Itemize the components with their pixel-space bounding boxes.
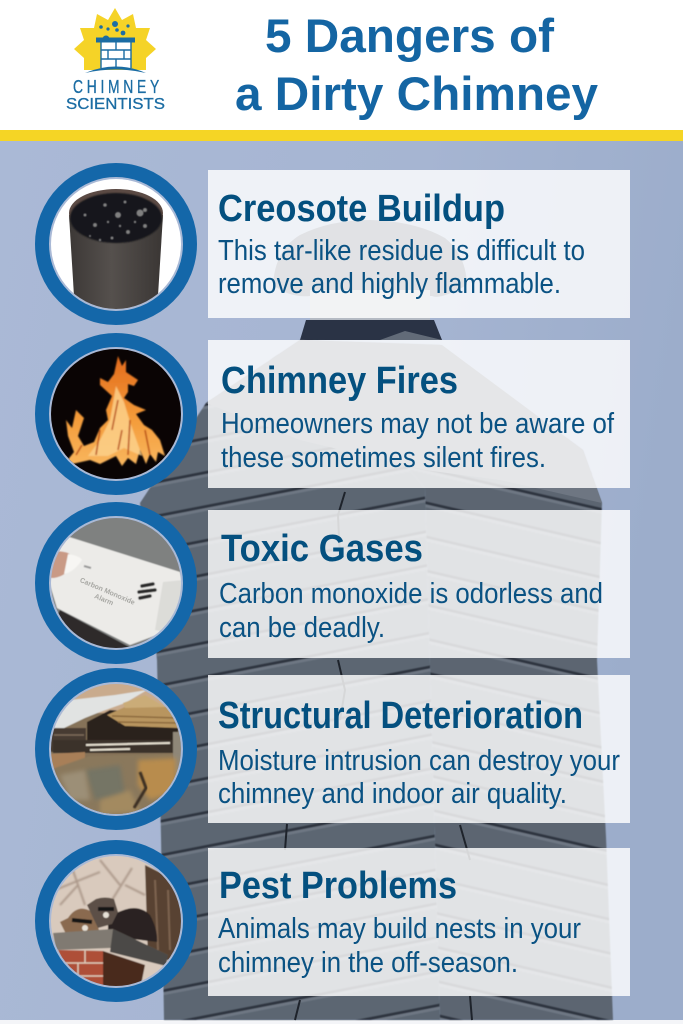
header background	[0, 0, 683, 130]
text block	[218, 235, 585, 300]
text block	[218, 913, 581, 979]
heading: Chimney Fires	[221, 360, 458, 402]
text block: chimney in the off-season.	[218, 947, 518, 979]
icon: yellow starburst	[74, 8, 156, 70]
logo wordmark: CHIMNEY	[73, 77, 159, 98]
heading: Toxic Gases	[221, 528, 423, 570]
panel: creosote buildup	[208, 170, 630, 318]
text block	[218, 745, 620, 810]
icon: fire photo	[42, 340, 190, 488]
logo wordmark	[66, 77, 165, 113]
text block: can be deadly.	[219, 612, 385, 644]
text block: Moisture intrusion can destroy your	[218, 745, 620, 777]
text block: these sometimes silent fires.	[221, 442, 546, 474]
text block: This tar-like residue is difficult to	[218, 235, 585, 267]
logo wordmark: SCIENTISTS	[66, 96, 165, 113]
text block: Animals may build nests in your	[218, 913, 581, 945]
icon: carbon monoxide alarm photo	[42, 509, 190, 657]
icon: deteriorated masonry photo	[42, 675, 190, 823]
panel: pest problems	[208, 848, 630, 996]
text block: Carbon monoxide is odorless and	[219, 578, 603, 610]
text block: remove and highly flammable.	[218, 268, 561, 300]
icon: carbon monoxide alarm photo: Carbon Monoxide	[79, 577, 136, 607]
heading: Creosote Buildup	[218, 188, 505, 230]
panel: structural deterioration	[208, 675, 630, 823]
title	[235, 9, 598, 120]
panel: toxic gases	[208, 510, 630, 658]
heading: Pest Problems	[219, 865, 457, 907]
icon: raccoons on chimney photo	[42, 847, 190, 995]
title: a Dirty Chimney	[235, 67, 598, 120]
logo: Chimney Scientists	[66, 8, 165, 113]
title: 5 Dangers of	[265, 9, 554, 62]
icon: creosote-filled pipe photo	[42, 170, 190, 318]
text block	[221, 408, 615, 474]
text block: chimney and indoor air quality.	[218, 778, 567, 810]
text block: Homeowners may not be aware of	[221, 408, 615, 440]
heading: Structural Deterioration	[218, 695, 583, 737]
icon: carbon monoxide alarm photo: Alarm	[93, 593, 114, 607]
panel: chimney fires	[208, 340, 630, 488]
text block	[219, 578, 603, 644]
icon: chimney with molecules	[85, 21, 146, 73]
yellow divider band	[0, 130, 683, 141]
background: chimney photo	[130, 220, 620, 1024]
